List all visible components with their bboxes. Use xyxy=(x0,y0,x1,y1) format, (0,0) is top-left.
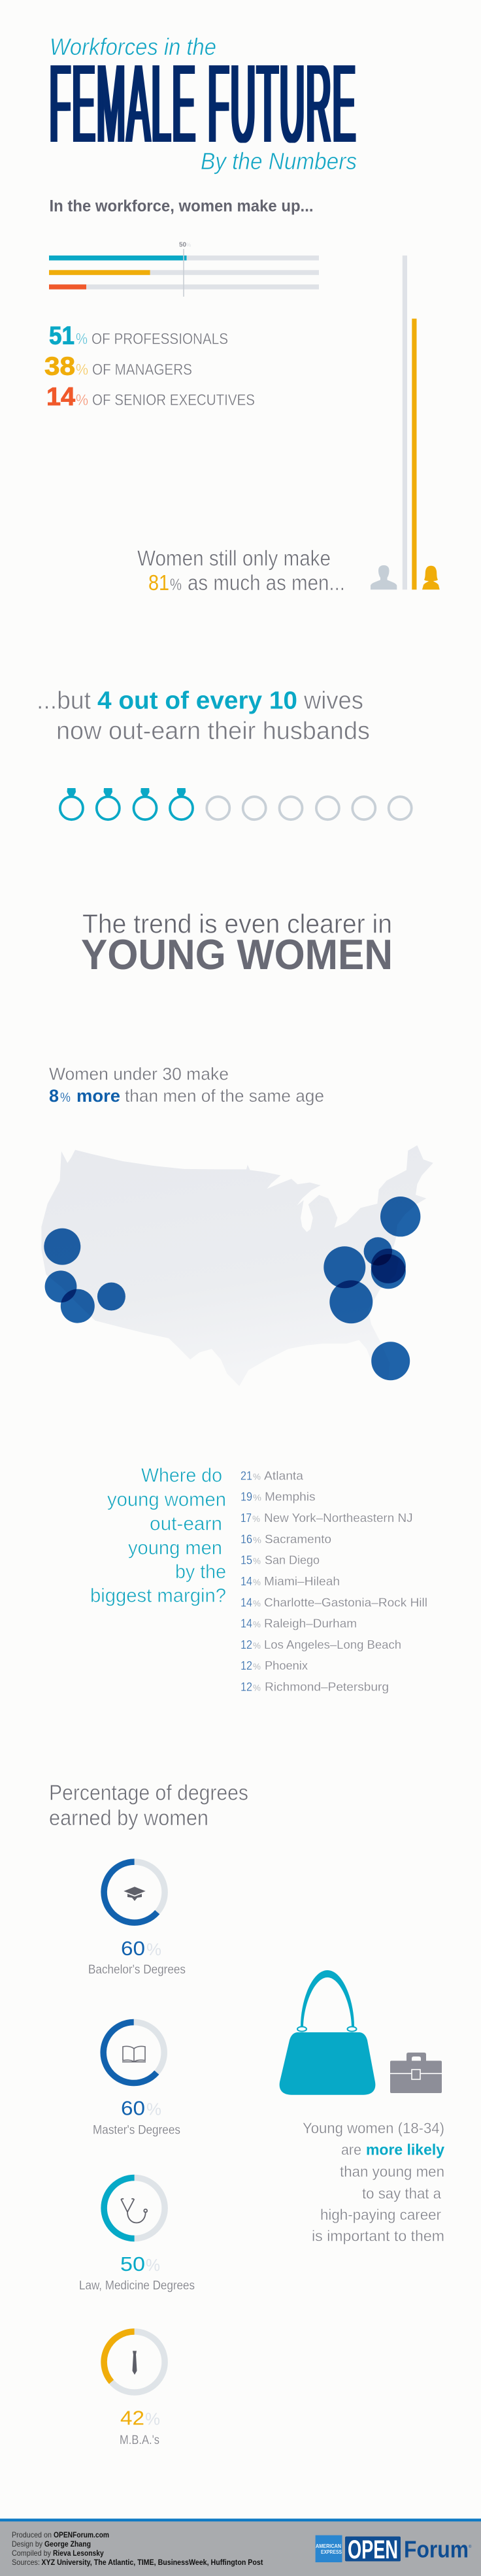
row: Charlotte: Charlotte–Gastonia–Rock Hill xyxy=(264,1596,427,1609)
stat: managers xyxy=(44,352,192,380)
row: Los Angeles: % xyxy=(253,1640,261,1651)
title: FEMALE FUTURE: FEMALE FUTURE xyxy=(47,42,355,166)
row: Memphis: Memphis xyxy=(265,1491,316,1504)
footer credits: XYZ University, The Atlantic, TIME, BusinessWeek, Huffington Post xyxy=(41,2558,263,2567)
stat: professionals: % xyxy=(76,331,88,348)
donut: MBAs xyxy=(104,2332,165,2392)
heading: degrees: Percentage of degrees xyxy=(49,1781,248,1805)
logo: American Express OPEN Forum xyxy=(316,2535,472,2564)
marker: Miami xyxy=(371,1342,410,1380)
text: wives out-earning husbands: 4 out of every 10 xyxy=(97,687,297,715)
question: biggest margin: young women xyxy=(107,1489,226,1510)
text: wives out-earning husbands xyxy=(37,687,370,745)
row: Sacramento xyxy=(241,1532,331,1545)
stat: senior executives: OF SENIOR EXECUTIVES xyxy=(92,391,255,409)
text: young women career: to say that a xyxy=(362,2185,441,2202)
row: Los Angeles: Los Angeles–Long Beach xyxy=(264,1638,401,1651)
stat: 60% bachelor's: % xyxy=(146,1940,161,1959)
row: New York: New York–Northeastern NJ xyxy=(264,1511,413,1525)
row: Richmond: % xyxy=(253,1682,261,1693)
list: metro rankings xyxy=(241,1469,427,1693)
text: wives out-earning husbands: wives xyxy=(303,687,363,715)
row: Memphis: 19 xyxy=(241,1491,252,1504)
stat: professionals xyxy=(49,322,228,350)
icon: stethoscope xyxy=(122,2199,147,2223)
stat: 60% bachelor's xyxy=(88,1937,186,1977)
footer credits: Sources: xyxy=(12,2558,40,2567)
stat: 42% MBAs: % xyxy=(145,2409,160,2429)
icon: graduation cap xyxy=(124,1887,146,1901)
row: Charlotte: % xyxy=(253,1598,261,1608)
ring 1 xyxy=(60,788,83,819)
text: women under 30: % xyxy=(60,1091,71,1105)
text: pay gap: as much as men... xyxy=(188,570,345,595)
logo: American Express OPEN Forum: Forum xyxy=(404,2535,469,2563)
row: Atlanta xyxy=(241,1469,304,1482)
stat: 50% law and medicine xyxy=(79,2253,195,2293)
donut: master's degrees xyxy=(103,2022,164,2083)
stat: 42% MBAs: 42 xyxy=(120,2407,144,2430)
marker: San Diego xyxy=(61,1289,95,1323)
text: women under 30: more xyxy=(76,1086,120,1106)
text: wives out-earning husbands: ...but xyxy=(37,687,91,715)
stat: 60% master's: 60 xyxy=(121,2096,145,2119)
heading: young women xyxy=(81,908,393,978)
text: young women career xyxy=(303,2120,444,2244)
footer credits: Produced on xyxy=(12,2530,52,2539)
icon: necktie xyxy=(132,2351,137,2375)
heading: degrees xyxy=(49,1781,248,1830)
marker: Phoenix xyxy=(97,1282,125,1311)
text: young women career: more likely xyxy=(366,2141,444,2158)
row: San Diego: San Diego xyxy=(265,1554,320,1567)
footer band xyxy=(0,2518,481,2576)
ring 4 xyxy=(170,788,193,819)
icon: briefcase xyxy=(390,2053,442,2093)
row: Raleigh: % xyxy=(253,1619,261,1630)
stat: senior executives: % xyxy=(76,391,88,409)
chart: pay gap bars xyxy=(403,256,417,589)
row: San Diego xyxy=(241,1554,320,1567)
footer credits: OPENForum.com xyxy=(54,2530,109,2539)
question: biggest margin: out-earn xyxy=(150,1513,222,1535)
icon: handbag xyxy=(280,1970,375,2095)
marker: Sacramento xyxy=(44,1229,80,1265)
row: Memphis xyxy=(241,1491,316,1504)
stat: 60% master's xyxy=(93,2096,180,2137)
donut: law and medicine degrees xyxy=(104,2177,165,2239)
text: pay gap: % xyxy=(170,576,182,594)
text: young women career: high-paying career xyxy=(320,2206,441,2223)
text: pay gap: Women still only make xyxy=(137,546,331,570)
question: biggest margin: by the xyxy=(175,1561,226,1583)
row: San Diego: % xyxy=(253,1556,261,1566)
stat: 50% law and medicine: % xyxy=(146,2255,160,2275)
row: Richmond: Richmond–Petersburg xyxy=(265,1680,389,1693)
row: Atlanta: Atlanta xyxy=(264,1469,304,1482)
text: women under 30: Women under 30 make xyxy=(49,1064,229,1083)
text: women under 30: 8 xyxy=(49,1086,59,1106)
row: Memphis: % xyxy=(253,1493,261,1503)
footer credits: Compiled by xyxy=(12,2549,51,2558)
row: Phoenix: % xyxy=(253,1661,261,1672)
row: Raleigh: Raleigh–Durham xyxy=(264,1617,357,1630)
icon: man xyxy=(371,565,397,589)
row: Atlanta: 21 xyxy=(241,1469,252,1482)
stat: 60% bachelor's: 60 xyxy=(121,1937,145,1960)
row: Phoenix xyxy=(241,1659,308,1672)
stat: 42% MBAs xyxy=(120,2407,160,2447)
row: Phoenix: 12 xyxy=(241,1659,252,1672)
stat: 60% bachelor's: Bachelor's Degrees xyxy=(88,1963,186,1977)
stat: professionals: 51 xyxy=(49,322,75,350)
footer credits xyxy=(12,2530,263,2567)
logo: American Express OPEN Forum: ® xyxy=(469,2545,472,2549)
question: biggest margin: biggest margin? xyxy=(90,1585,226,1607)
stat: senior executives xyxy=(46,383,255,411)
footer credits: George Zhang xyxy=(44,2539,91,2549)
row: Atlanta: % xyxy=(253,1471,261,1481)
row: San Diego: 15 xyxy=(241,1554,252,1567)
row: Sacramento: % xyxy=(253,1534,261,1545)
row: Phoenix: Phoenix xyxy=(265,1659,308,1672)
marker: Charlotte xyxy=(371,1254,406,1289)
text: women under 30: than men of the same age xyxy=(125,1086,324,1106)
marker: Atlanta xyxy=(329,1280,373,1323)
row: Miami: Miami–Hileah xyxy=(264,1575,340,1588)
map: United States xyxy=(41,1146,433,1386)
stat: 60% master's: Master's Degrees xyxy=(93,2123,180,2137)
marker: Raleigh xyxy=(371,1249,406,1283)
icon: open book xyxy=(122,2046,146,2062)
stat: 60% master's: % xyxy=(146,2099,161,2119)
donut: bachelor's degrees xyxy=(104,1862,165,1923)
footer credits: Rieva Lesonsky xyxy=(53,2549,104,2558)
logo: American Express OPEN Forum: AMERICAN xyxy=(316,2543,341,2549)
ring 2 xyxy=(97,788,120,819)
text: wives out-earning husbands: now out-earn their husbands xyxy=(56,718,370,745)
row: New York: 17 xyxy=(241,1511,252,1525)
stat: managers: OF MANAGERS xyxy=(92,361,192,378)
stat: 50% law and medicine: 50 xyxy=(120,2253,145,2275)
text: young women career: Young women (18-34) xyxy=(303,2120,444,2137)
stat: 50% law and medicine: Law, Medicine Degrees xyxy=(79,2279,195,2293)
marker: Los Angeles xyxy=(45,1270,76,1302)
logo: American Express OPEN Forum: EXPRESS xyxy=(321,2549,342,2555)
stat: managers: 38 xyxy=(44,352,75,380)
marker: Memphis xyxy=(323,1246,365,1288)
title tail: By the Numbers xyxy=(201,148,357,174)
empty rings xyxy=(207,797,412,819)
heading: young women: YOUNG WOMEN xyxy=(81,931,393,978)
question: biggest margin: Where do xyxy=(141,1464,222,1486)
stat: professionals: OF PROFESSIONALS xyxy=(91,331,228,348)
row: New York: % xyxy=(252,1513,260,1524)
row: Miami: % xyxy=(253,1577,261,1587)
question: biggest margin xyxy=(90,1464,226,1607)
footer credits: Design by xyxy=(12,2539,42,2549)
row: Sacramento: 16 xyxy=(241,1532,252,1545)
heading: workforce: In the workforce, women make up... xyxy=(50,197,314,215)
marker: New York xyxy=(380,1197,420,1236)
row: Sacramento: Sacramento xyxy=(265,1532,331,1545)
marker: Richmond xyxy=(364,1237,392,1266)
text: pay gap: 81 xyxy=(148,570,169,595)
stat: senior executives: 14 xyxy=(46,383,75,411)
stat: managers: % xyxy=(76,361,88,378)
question: biggest margin: young men xyxy=(128,1537,222,1559)
text: young women career: are xyxy=(341,2141,361,2158)
row: Charlotte: 14 xyxy=(241,1596,252,1609)
title kicker: Workforces in the xyxy=(50,33,216,60)
bar chart: share of women in the workforce: 50% xyxy=(179,242,191,249)
text: young women career: is important to them xyxy=(312,2227,444,2244)
text: pay gap xyxy=(137,546,345,595)
ring 3 xyxy=(133,788,157,819)
bar chart: share of women in the workforce xyxy=(49,242,319,297)
row: Los Angeles: 12 xyxy=(241,1638,252,1651)
heading: young women: The trend is even clearer in xyxy=(82,908,392,938)
row: Richmond: 12 xyxy=(241,1680,252,1693)
map markers: metro areas xyxy=(44,1197,420,1380)
row: Miami: 14 xyxy=(241,1575,252,1588)
icon: woman xyxy=(422,566,440,589)
heading: degrees: earned by women xyxy=(49,1806,208,1830)
logo: American Express OPEN Forum: OPEN xyxy=(348,2535,398,2564)
text: women under 30 xyxy=(49,1064,324,1106)
stat: 42% MBAs: M.B.A.'s xyxy=(120,2434,159,2447)
icon row: 4 of 10 rings xyxy=(60,788,412,819)
row: Raleigh: 14 xyxy=(241,1617,252,1630)
text: young women career: than young men xyxy=(340,2163,444,2180)
